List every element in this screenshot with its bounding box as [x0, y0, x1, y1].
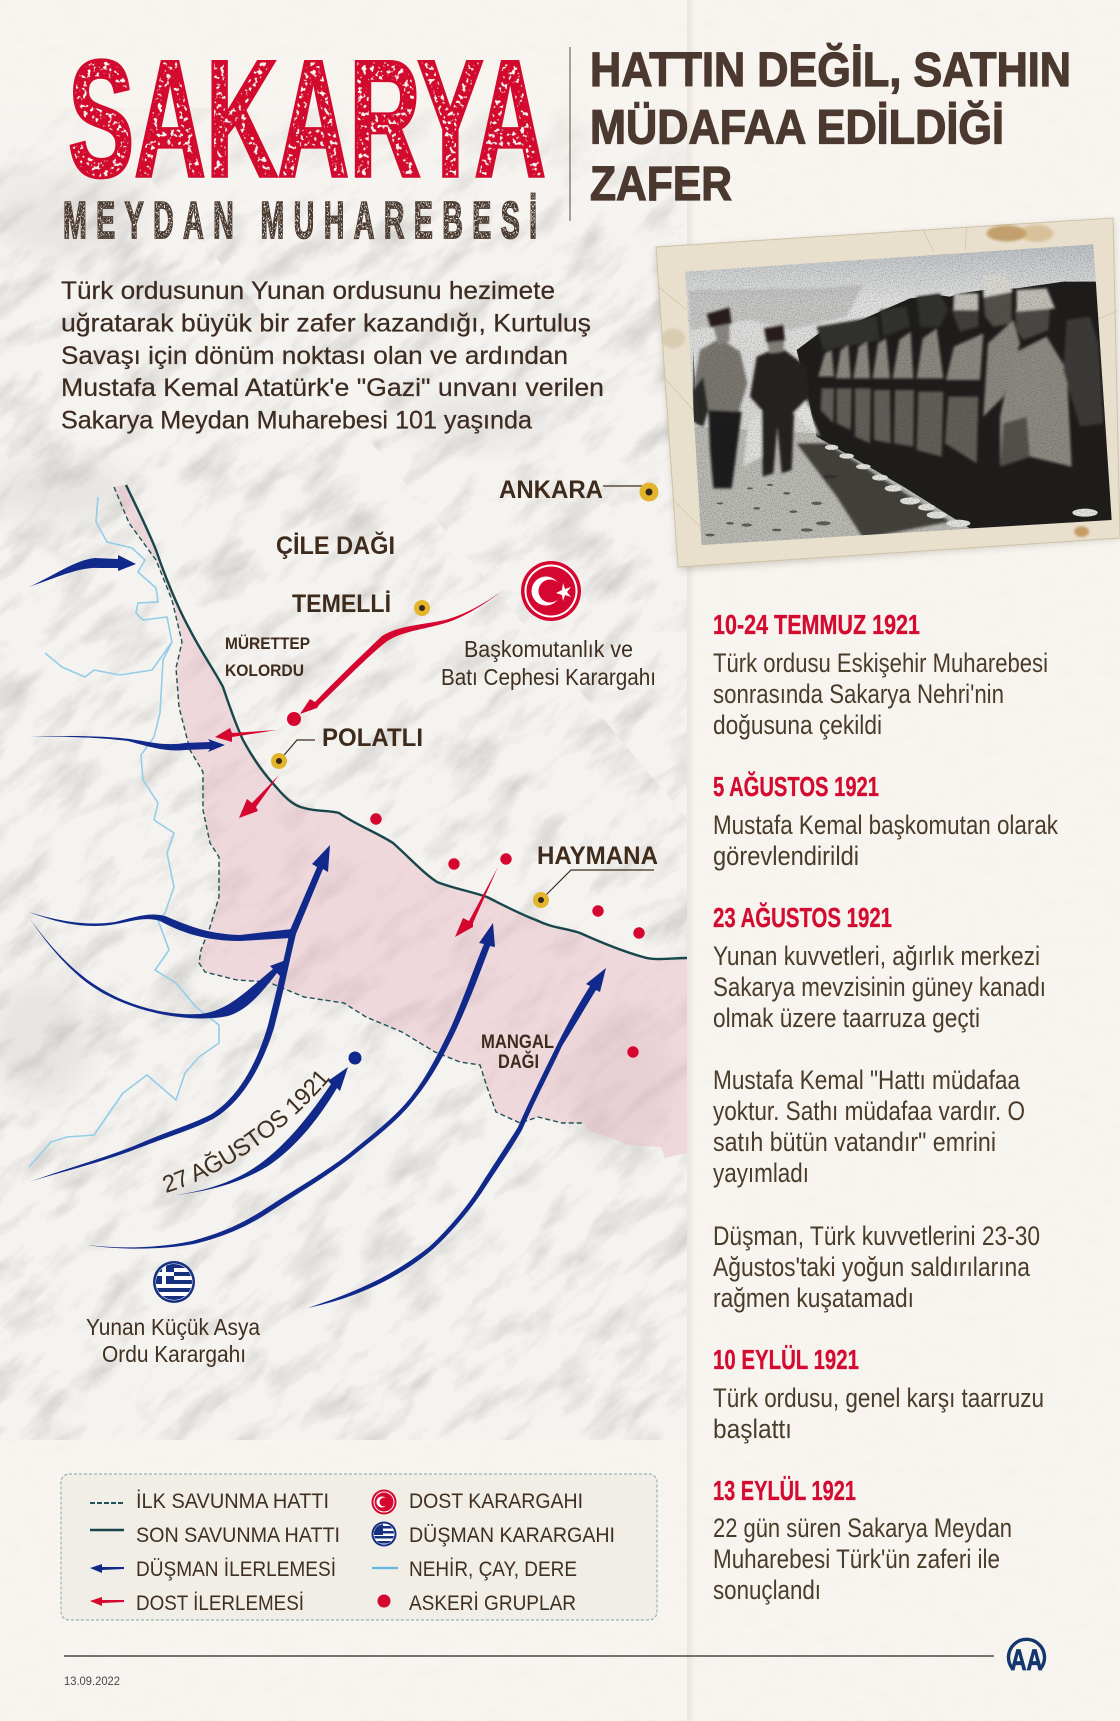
last defence line	[126, 485, 687, 959]
footer rule	[64, 1655, 994, 1657]
legend: last defence line: SON SAVUNMA HATTI	[136, 1524, 340, 1547]
arrow: Polatlı counter move	[239, 775, 279, 818]
label: 27 August 1921: 27 AĞUSTOS 1921	[163, 1071, 330, 1193]
timeline: 13 Eylül 1921: Muharebesi Türk'ün zaferi ile	[713, 1544, 1000, 1574]
headline: MÜDAFAA EDİLDİĞİ	[590, 100, 1004, 154]
place: Mangal Dağı: DAĞI	[498, 1051, 539, 1073]
timeline: 5 Ağustos 1921: görevlendirildi	[713, 841, 859, 871]
timeline: Atatürk order	[713, 1065, 1025, 1188]
headline: ZAFER	[590, 158, 732, 211]
arrow: northern advance	[29, 555, 136, 587]
timeline: 23 Ağustos 1921	[713, 902, 1046, 1033]
place: Polatlı	[271, 724, 423, 769]
timeline: enemy failed	[713, 1221, 1040, 1313]
timeline: 10 Eylül 1921	[713, 1344, 1044, 1444]
arrow: long advance to front	[29, 845, 330, 1182]
man in suit	[750, 347, 810, 477]
legend: first defence line: İLK SAVUNMA HATTI	[136, 1490, 329, 1513]
boots row	[825, 445, 1098, 527]
timeline: 5 Ağustos 1921	[713, 771, 1059, 871]
rivers	[29, 497, 219, 1167]
timeline: 23 Ağustos 1921: Sakarya mevzisinin güney kanadı	[713, 972, 1046, 1002]
legend: military groups: ASKERİ GRUPLAR	[409, 1592, 576, 1615]
timeline: 13 Eylül 1921: 22 gün süren Sakarya Meydan	[713, 1513, 1012, 1543]
intro text block: Sakarya Meydan Muharebesi 101 yaşında	[61, 406, 532, 434]
intro text block: Mustafa Kemal Atatürk'e "Gazi" unvanı verilen	[61, 374, 604, 402]
timeline: 5 Ağustos 1921: Mustafa Kemal başkomutan olarak	[713, 810, 1059, 840]
arrow: from headquarters	[300, 588, 507, 714]
place: Ankara: ANKARA	[499, 476, 603, 504]
distant hillside	[688, 285, 863, 330]
timeline: 10-24 Temmuz 1921	[713, 609, 1048, 740]
timeline: 23 Ağustos 1921: 23 AĞUSTOS 1921	[713, 902, 892, 933]
icon: Greek headquarters seal	[153, 1261, 195, 1303]
timeline: enemy failed: rağmen kuşatamadı	[713, 1283, 914, 1313]
timeline: 10 Eylül 1921: başlattı	[713, 1414, 792, 1444]
legend: friendly headquarters: DOST KARARGAHI	[409, 1490, 583, 1513]
place: Mangal Dağı: MANGAL	[481, 1032, 554, 1053]
headline: HATTIN DEĞİL, SATHIN	[590, 43, 1071, 97]
first defence line	[114, 487, 583, 1123]
headline	[590, 43, 1071, 211]
label: headquarters: Batı Cephesi Karargahı	[441, 664, 656, 690]
timeline: 10-24 Temmuz 1921: Türk ordusu Eskişehir Muharebesi	[713, 648, 1048, 678]
subtitle: Meydan Muharebesi: MEYDAN MUHAREBESİ	[63, 191, 537, 249]
arrow: far south advance	[308, 968, 606, 1308]
timeline: Atatürk order: yoktur. Sathı müdafaa vardır. O	[713, 1096, 1025, 1126]
timeline: enemy failed: Ağustos'taki yoğun saldırılarına	[713, 1252, 1030, 1282]
arrow: west counter move	[215, 728, 277, 742]
timeline: Atatürk order: satıh bütün vatandır" emrini	[713, 1127, 996, 1157]
place: Mürettep Kolordu: KOLORDU	[225, 661, 304, 680]
timeline: enemy failed: Düşman, Türk kuvvetlerini 23-30	[713, 1221, 1040, 1251]
place: Mangal Dağı	[481, 1032, 554, 1073]
place: Mürettep Kolordu	[225, 634, 310, 680]
timeline: 13 Eylül 1921	[713, 1475, 1012, 1605]
arrow: central advance	[29, 736, 225, 752]
intro text block: Türk ordusunun Yunan ordusunu hezimete	[61, 277, 555, 305]
legend: enemy headquarters: DÜŞMAN KARARGAHI	[409, 1524, 615, 1547]
label: headquarters	[441, 636, 656, 690]
timeline: Atatürk order: yayımladı	[713, 1158, 809, 1188]
military group dots	[287, 712, 645, 1058]
front soldier coat	[1000, 337, 1072, 467]
enemy advance arrows	[29, 555, 606, 1308]
label: Greek headquarters	[86, 1314, 261, 1367]
intro text block	[61, 277, 604, 434]
timeline: 23 Ağustos 1921: olmak üzere taarruza geçti	[713, 1003, 980, 1033]
divider	[569, 47, 571, 221]
sky and ground	[680, 240, 1117, 550]
timeline: Atatürk order: Mustafa Kemal "Hattı müdafaa	[713, 1065, 1020, 1095]
pink battle zone	[114, 485, 687, 1158]
date: 13.09.2022	[64, 1674, 120, 1688]
intro text block: uğratarak büyük bir zafer kazandığı, Kurtuluş	[61, 310, 591, 338]
paper fold	[687, 0, 696, 1721]
place: Haymana	[533, 842, 658, 908]
place: Ankara	[499, 476, 658, 504]
place: Çile Dağı: ÇİLE DAĞI	[276, 531, 395, 560]
timeline: 10-24 Temmuz 1921: sonrasında Sakarya Nehri'nin	[713, 679, 1004, 709]
terrain map background	[0, 108, 687, 1440]
man in uniform	[693, 338, 747, 413]
soldier heads and caps	[1015, 308, 1050, 340]
arrow: Haymana counter move	[455, 867, 498, 937]
arrow: curved branch	[29, 917, 286, 1018]
photo frame	[656, 218, 1120, 567]
photo: inspection of troops	[656, 218, 1120, 570]
timeline: 23 Ağustos 1921: Yunan kuvvetleri, ağırlık merkezi	[713, 941, 1040, 971]
place: Mürettep Kolordu: MÜRETTEP	[225, 634, 310, 653]
soldier row	[797, 282, 1117, 528]
timeline: 10-24 Temmuz 1921: 10-24 TEMMUZ 1921	[713, 609, 920, 640]
place: Polatlı: POLATLI	[322, 724, 423, 752]
enemy group dot	[348, 1052, 362, 1064]
timeline: 13 Eylül 1921: 13 EYLÜL 1921	[713, 1475, 856, 1506]
label: Greek headquarters: Yunan Küçük Asya	[86, 1314, 261, 1340]
timeline: 10-24 Temmuz 1921: doğusuna çekildi	[713, 710, 882, 740]
friendly advance arrows	[215, 588, 507, 937]
place: Haymana: HAYMANA	[537, 842, 658, 870]
label: Greek headquarters: Ordu Karargahı	[102, 1341, 246, 1367]
arrow: joining branch	[29, 912, 292, 941]
intro text block: Savaşı için dönüm noktası olan ve ardından	[61, 342, 568, 370]
icon: Turkish headquarters seal	[521, 561, 581, 621]
timeline: 13 Eylül 1921: sonuçlandı	[713, 1575, 821, 1605]
icon: AA logo: AA	[1010, 1644, 1042, 1677]
timeline: 10 Eylül 1921: 10 EYLÜL 1921	[713, 1344, 859, 1375]
arrow: southern advance	[87, 923, 495, 1249]
legend	[61, 1474, 657, 1620]
label: headquarters: Başkomutanlık ve	[464, 636, 633, 662]
legend: rivers: NEHİR, ÇAY, DERE	[409, 1558, 577, 1581]
timeline: 10 Eylül 1921: Türk ordusu, genel karşı taarruzu	[713, 1383, 1044, 1413]
arrow: 27 August advance	[176, 1067, 348, 1195]
timeline: 5 Ağustos 1921: 5 AĞUSTOS 1921	[713, 771, 879, 802]
legend: enemy advance: DÜŞMAN İLERLEMESİ	[136, 1558, 336, 1581]
legend: friendly advance: DOST İLERLEMESİ	[136, 1592, 304, 1615]
place: Temelli: TEMELLİ	[292, 590, 391, 618]
icon: AA logo	[1008, 1639, 1044, 1677]
title: Sakarya: SAKARYA	[68, 27, 546, 212]
